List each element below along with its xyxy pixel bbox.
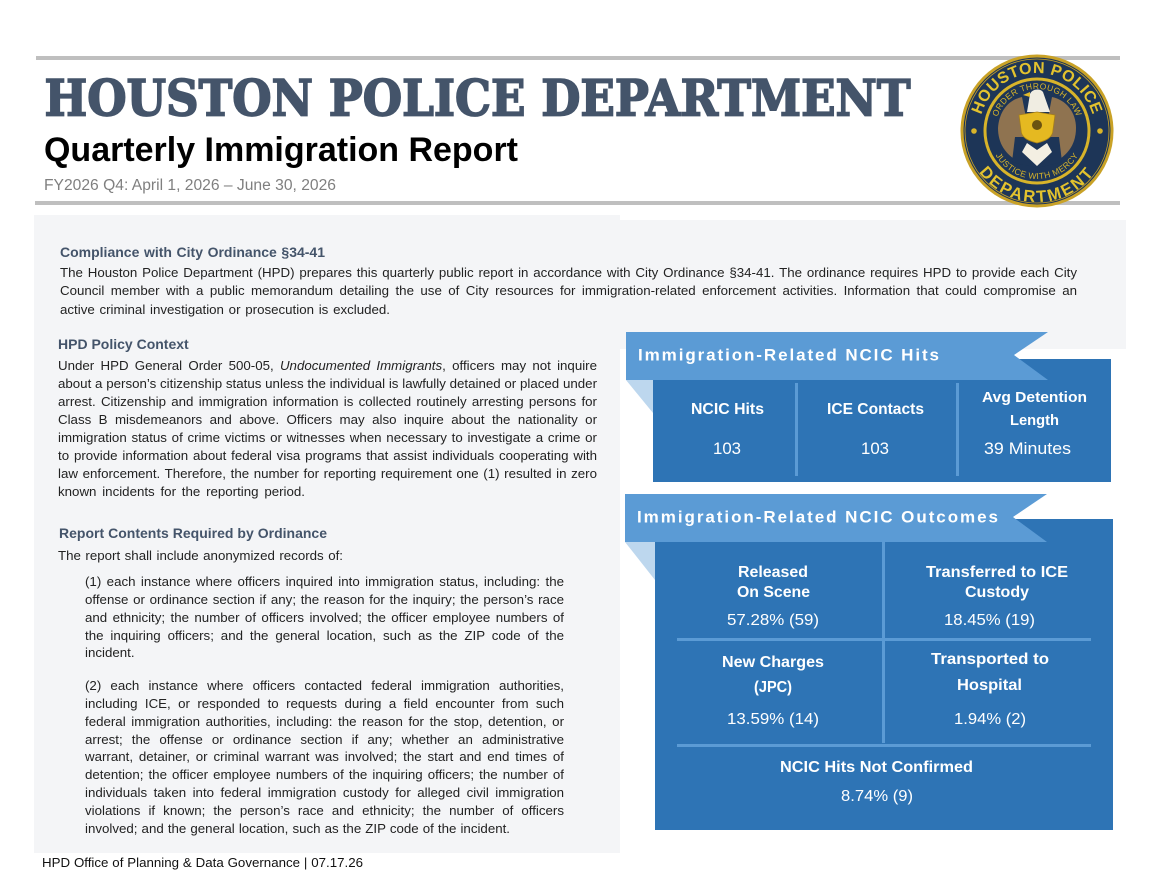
stat: transported to hospital [931,651,1049,728]
stat: average detention length: Length [1010,412,1059,429]
header bottom rule [35,201,1120,205]
stat: transported to hospital: 1.94% (2) [954,711,1026,728]
paragraph: compliance: active criminal investigation or prosecution is excluded. [60,302,390,316]
footer: HPD Office of Planning & Data Governance | 07.17.26 [42,855,363,870]
stat: transferred to ICE custody: Transferred to ICE [926,564,1068,581]
stat: NCIC hits [691,401,764,458]
text block: policy context [58,336,597,499]
ribbon [626,332,1048,380]
paragraph: compliance [60,265,1077,316]
stat: not confirmed [780,759,973,805]
item 2 [85,678,564,836]
paragraph: policy context: arrest. Citizenship and immigration information is collected routinely arresting persons for [58,394,597,409]
stat: transferred to ICE custody: Custody [965,584,1029,601]
heading: compliance: Compliance with City Ordinance §34-41 [60,244,325,260]
ribbon fold [626,380,653,413]
logo: HPD seal: JUSTICE WITH MERCY [996,152,1077,179]
item 1: (1) each instance where officers inquired into immigration status, including: the [85,574,564,588]
stat: ICE contacts: 103 [861,440,889,458]
stat: released on scene: 57.28% (59) [727,612,819,629]
logo: HPD seal: DEPARTMENT [980,166,1092,202]
paragraph: policy context [58,358,597,499]
panel: NCIC outcomes [625,494,1113,830]
item 2: arrest; the offense or ordinance section if any; whether an administrative [85,732,564,746]
paragraph: compliance: The Houston Police Department (HPD) prepares this quarterly public report in accordance with City Ordinance §34-41. The ordinance requires HPD to provide each City [60,265,1077,280]
stat: not confirmed: NCIC Hits Not Confirmed [780,759,973,776]
stat: released on scene [727,564,819,629]
stat: ICE contacts [827,401,924,458]
stat: average detention length [982,389,1087,458]
panel body [653,359,1111,482]
text block: compliance [60,244,1077,316]
ribbon title: Immigration-Related NCIC Outcomes [637,508,998,526]
panel: right background [620,220,1126,349]
item 1: the inquiring officers; and the general location, such as the ZIP code of the [85,628,564,642]
ribbon [625,494,1047,542]
intro line: The report shall include anonymized records of: [58,548,343,562]
stat: new charges: (JPC) [754,679,792,696]
stat: ICE contacts: ICE Contacts [827,401,924,418]
stat: transferred to ICE custody [926,564,1068,629]
ribbon fold [625,542,655,580]
stat: new charges: 13.59% (14) [727,711,819,728]
heading: report contents: Report Contents Required by Ordinance [59,525,327,541]
item 2: detention; the officer employee numbers of the inquiring officers; the number of [85,766,564,782]
item 2: including ICE, or responded to requests during a field encounter from such [85,696,564,710]
stat: new charges [722,654,824,728]
stat: transported to hospital: Transported to [931,651,1049,668]
logo: HPD seal [960,54,1114,208]
stat: released on scene: On Scene [737,584,810,601]
stat: new charges: New Charges [722,654,824,671]
paragraph: policy context: immigration status of crime victims or witnesses when necessary to investigate a crime or [58,430,597,445]
ribbon title: Immigration-Related NCIC Hits [638,346,939,364]
logo: HPD seal: ORDER THROUGH LAW [992,83,1082,116]
item 2: warrant, detainer, or criminal warrant was involved; the start and end times of [85,748,564,764]
item 1: and ethnicity; the number of officers involved; the officer employee numbers of [85,610,564,624]
stat: average detention length: 39 Minutes [984,440,1071,458]
stat: NCIC hits: 103 [713,440,741,458]
panel body [655,519,1113,830]
paragraph: policy context: about a person’s citizenship status unless the individual is lawfully detained or placed under [58,376,597,391]
heading: policy context: HPD Policy Context [58,336,189,352]
logo: HPD seal: HOUSTON POLICE [971,62,1103,114]
paragraph: policy context: Class B misdemeanors and above. Officers may also inquire about the nationality or [58,412,597,427]
stat: NCIC hits: NCIC Hits [691,401,764,418]
panel: NCIC hits [626,332,1111,482]
item 2: (2) each instance where officers contacted federal immigration authorities, [85,678,564,692]
item 1: offense or ordinance section if any; the reason for the inquiry; the person’s race [85,592,564,606]
header top rule [36,56,1120,60]
item 2: violations if known; the person’s race and ethnicity; the number of officers [85,802,564,818]
reporting period: FY2026 Q4: April 1, 2026 – June 30, 2026 [44,177,336,194]
item 2: involved; and the general location, such as the ZIP code of the incident. [85,820,510,836]
item 2: federal immigration authorities, including: the reason for the stop, detention, or [85,714,564,728]
item 1 [85,574,564,660]
text block: report contents [58,525,564,836]
item 1: incident. [85,644,135,660]
paragraph: policy context: law enforcement. Therefore, the number for reporting requirement one (1) resulted in zero [58,466,597,481]
stat: not confirmed: 8.74% (9) [841,788,913,805]
item 2: individuals taken into federal immigration custody for alleged civil immigration [85,784,564,800]
stat: transferred to ICE custody: 18.45% (19) [944,612,1035,629]
paragraph: policy context: to provide information about federal visa programs that assist individuals cooperating with [58,448,597,463]
subtitle: Quarterly Immigration Report [44,131,518,169]
stat: transported to hospital: Hospital [957,677,1022,694]
paragraph: compliance: Council member with a public memorandum detailing the use of City resources for immigration-related enforcement activities. Information that could compromise an [60,283,1077,298]
panel: left background [34,215,620,853]
stat: average detention length: Avg Detention [982,389,1087,406]
paragraph: policy context: known incidents for the reporting period. [58,484,305,499]
stat: released on scene: Released [738,564,808,581]
paragraph: policy context: Under HPD General Order 500-05, Undocumented Immigrants, officers may not inquire [58,358,597,373]
